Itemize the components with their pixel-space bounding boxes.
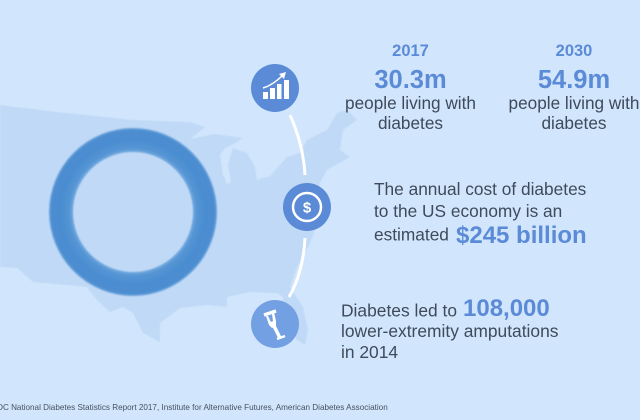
stat: 2017: diabetes (378, 113, 443, 133)
ring (61, 140, 205, 284)
cost text (374, 179, 587, 249)
cost text: to the US economy is an (374, 201, 562, 221)
stat: 2030: diabetes (542, 113, 606, 133)
amputation text: lower-extremity amputations (341, 321, 559, 341)
stat: 2030: 54.9m (538, 66, 610, 94)
amputation text: in 2014 (341, 342, 398, 362)
amputation text: 108,000 (463, 295, 550, 322)
amputation text: Diabetes led to (341, 300, 457, 320)
stat: 2017: 30.3m (374, 66, 447, 94)
connector arc (289, 115, 305, 297)
cost text: estimated (374, 224, 449, 244)
stat: 2030: people living with (509, 93, 639, 113)
map of the United States (0, 105, 357, 345)
cost text: $245 billion (456, 222, 587, 249)
icon: dollar coin (283, 183, 331, 231)
cost text: The annual cost of diabetes (374, 179, 587, 199)
stat: 2030: 2030 (556, 42, 592, 60)
stat: 2030 (509, 42, 639, 133)
icon: growth chart (251, 64, 299, 112)
amputation text (341, 295, 559, 362)
stat: 2017: 2017 (392, 42, 429, 60)
stat: 2017: people living with (345, 93, 476, 113)
source footnote: CDC National Diabetes Statistics Report 2017, Institute for Alternative Futures, American Diabetes Association (0, 403, 388, 412)
stat: 2017 (345, 42, 476, 133)
icon: crutch (251, 300, 299, 348)
icon: dollar coin: $ (303, 200, 312, 216)
